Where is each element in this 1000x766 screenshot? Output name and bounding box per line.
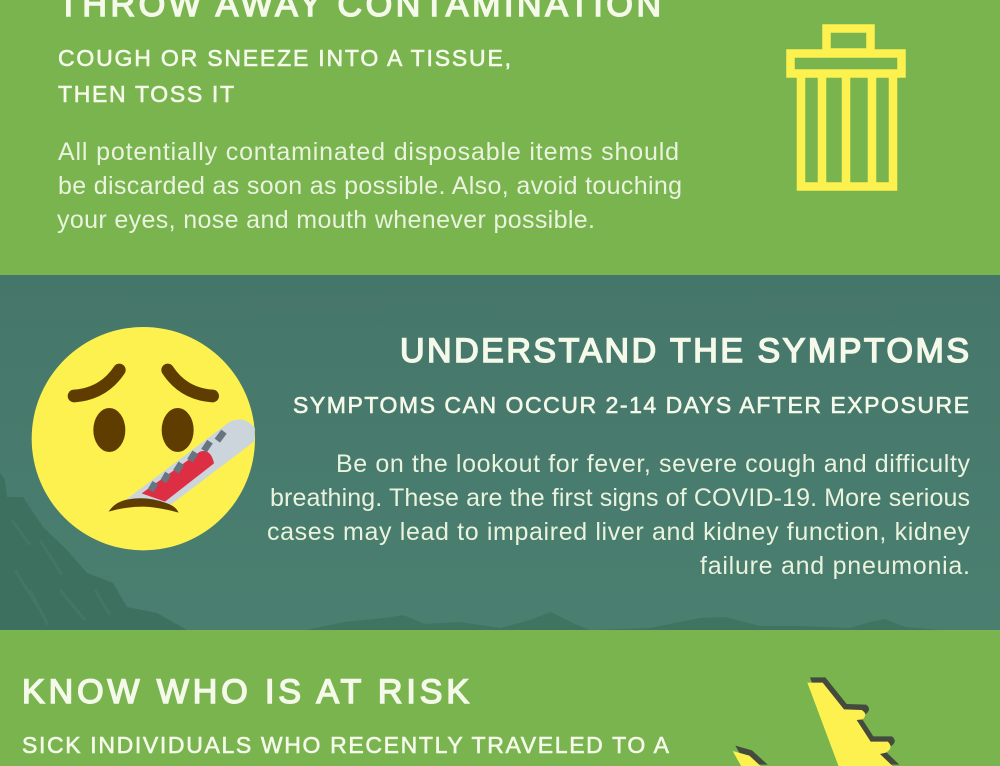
text block: symptoms: breathing. These are the first signs of COVID-19. More serious bbox=[270, 484, 970, 512]
subheading: sick individuals: SICK INDIVIDUALS WHO RECENTLY TRAVELED TO A bbox=[22, 732, 670, 758]
subheading: cough or sneeze: COUGH OR SNEEZE INTO A TISSUE, bbox=[58, 45, 511, 71]
text block: symptoms: Be on the lookout for fever, severe cough and difficulty bbox=[336, 450, 970, 478]
icon: sick face with thermometer bbox=[32, 327, 255, 550]
mountains left bbox=[0, 473, 187, 630]
icon: trash can bbox=[790, 28, 902, 186]
text block: symptoms: cases may lead to impaired liver and kidney function, kidney bbox=[267, 518, 970, 546]
mountains bottom bbox=[305, 612, 940, 630]
text block: symptoms: failure and pneumonia. bbox=[700, 552, 970, 580]
text block: discard items bbox=[57, 138, 682, 234]
text block: symptoms bbox=[267, 450, 970, 580]
panel: know who is at risk bbox=[0, 630, 1000, 766]
subheading: cough or sneeze bbox=[58, 45, 511, 107]
heading: know who is at risk: KNOW WHO IS AT RISK bbox=[22, 673, 469, 711]
heading: understand the symptoms: UNDERSTAND THE SYMPTOMS bbox=[400, 332, 969, 370]
text block: discard items: be discarded as soon as possible. Also, avoid touching bbox=[58, 172, 682, 200]
text block: discard items: All potentially contaminated disposable items should bbox=[58, 138, 679, 166]
text block: discard items: your eyes, nose and mouth whenever possible. bbox=[57, 206, 595, 234]
icon: airplane bbox=[733, 677, 899, 766]
panel: understand the symptoms bbox=[0, 275, 1000, 630]
subheading: symptoms timing: SYMPTOMS CAN OCCUR 2-14 DAYS AFTER EXPOSURE bbox=[293, 392, 969, 418]
subheading: cough or sneeze: THEN TOSS IT bbox=[58, 81, 234, 107]
panel: throw away contamination bbox=[0, 0, 1000, 275]
